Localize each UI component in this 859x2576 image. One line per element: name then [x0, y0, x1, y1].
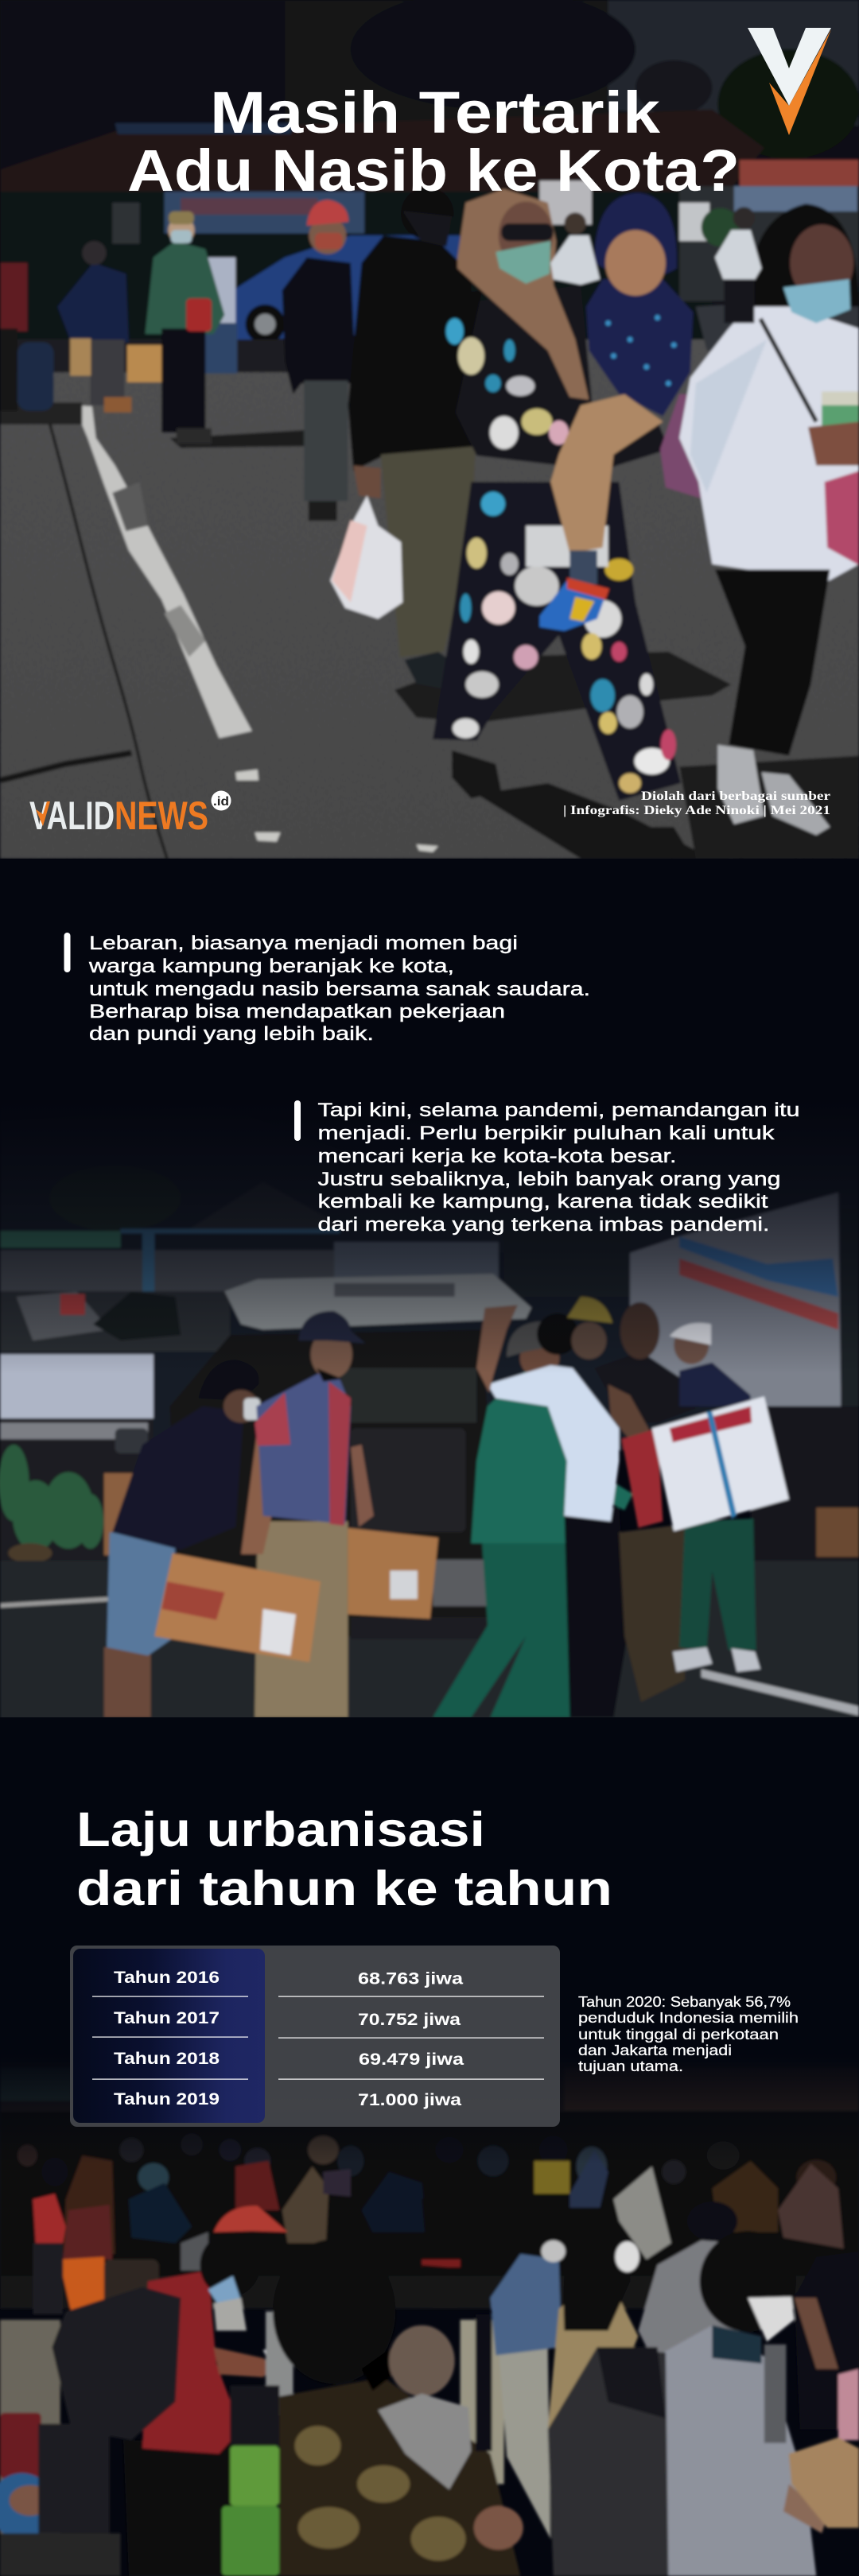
paragraph: Tapi kini: menjadi. Perlu berpikir puluhan kali untuk	[318, 1123, 775, 1144]
year column	[73, 1949, 265, 2123]
child being carried	[586, 279, 693, 416]
green bags and cart	[230, 2446, 279, 2506]
year column: Tahun 2017	[114, 2009, 220, 2027]
heading: Laju urbanisasi: dari tahun ke tahun	[76, 1861, 612, 1915]
panel: urbanization rate section	[0, 1717, 859, 2576]
paragraph: Lebaran: dan pundi yang lebih baik.	[89, 1023, 374, 1045]
source credit: | Infografis: Dieky Ade Ninoki | Mei 2021	[563, 804, 830, 817]
woman in white sweater	[660, 394, 702, 499]
source credit	[563, 789, 830, 817]
paragraph: Tapi kini: dari mereka yang terkena imbas pandemi.	[318, 1214, 770, 1236]
officers	[550, 235, 600, 285]
year column: Tahun 2019	[114, 2090, 220, 2109]
man in batik carrying baby	[279, 2377, 520, 2576]
navy fade over photo	[0, 1717, 859, 2576]
left background people	[0, 263, 27, 332]
girl in denim jacket	[499, 2347, 550, 2539]
men behind the box	[619, 1524, 685, 1702]
photo scene: street with masked people	[0, 0, 859, 859]
headline: Masih Tertarik	[210, 80, 661, 145]
photo scene: crowded terminal	[0, 1717, 859, 2576]
value column: 69.479 jiwa	[359, 2050, 464, 2069]
paragraph: Tapi kini: kembali ke kampung, karena tidak sedikit	[318, 1191, 768, 1212]
accent bar	[64, 933, 70, 972]
side note: 2020: untuk tinggal di perkotaan	[578, 2027, 779, 2043]
value column: 71.000 jiwa	[358, 2091, 461, 2109]
year column: Tahun 2018	[114, 2050, 220, 2068]
logo: VALIDNEWS.id	[29, 790, 231, 838]
year column: Tahun 2016	[114, 1969, 220, 1987]
man in black hoodie	[348, 235, 472, 471]
panel: hero photo of travellers walking	[0, 0, 859, 859]
side note: 2020: penduduk Indonesia memilih	[578, 2010, 799, 2026]
man in white shirt	[564, 1507, 628, 1717]
logo: VALIDNEWS.id: NEWS	[115, 793, 208, 838]
paragraph: Lebaran: warga kampung beranjak ke kota,	[88, 956, 454, 977]
side note: 2020	[578, 1994, 799, 2074]
value column	[278, 1970, 544, 2109]
woman with orange pants	[63, 2155, 115, 2260]
white carton	[622, 1428, 663, 1528]
heading: Laju urbanisasi: Laju urbanisasi	[76, 1802, 485, 1856]
logo: VALIDNEWS.id: VALID	[29, 793, 115, 838]
side note: 2020: dan Jakarta menjadi	[578, 2043, 732, 2058]
value column: 70.752 jiwa	[358, 2011, 461, 2029]
cardboard boxes	[154, 1553, 321, 1662]
man in grey shirt	[638, 2240, 740, 2353]
girl in beige coat	[548, 2287, 638, 2429]
side note: 2020: tujuan utama.	[578, 2058, 683, 2074]
man in black tee, red cap	[282, 258, 356, 394]
value column: 68.763 jiwa	[358, 1970, 463, 1988]
paragraph: Tapi kini: mencari kerja ke kota-kota besar.	[318, 1146, 676, 1167]
woman in floral outfit	[444, 285, 670, 467]
boxes	[789, 2438, 859, 2528]
van	[224, 1274, 531, 1329]
paragraph: Tapi kini: Tapi kini, selama pandemi, pemandangan itu	[318, 1100, 800, 1121]
paragraph: Tapi kini: Justru sebaliknya, lebih banyak orang yang	[318, 1169, 781, 1190]
floral pattern	[446, 318, 676, 793]
icon: V brand mark	[748, 28, 831, 135]
plastic bag	[330, 495, 402, 619]
background crowd	[17, 2133, 836, 2195]
potted plants	[0, 1445, 103, 1551]
heading: Laju urbanisasi	[76, 1802, 612, 1915]
shadows	[395, 652, 732, 723]
logo: VALIDNEWS.id: .id	[213, 795, 229, 809]
accent bar	[294, 1100, 301, 1141]
paragraph: Tapi kini	[294, 1100, 800, 1236]
man with cap and dark jersey	[104, 1647, 150, 1717]
source credit: Diolah dari berbagai sumber	[641, 789, 830, 803]
man in red shirt with backpack	[123, 2440, 235, 2576]
headline: Adu Nasib ke Kota?	[127, 138, 740, 204]
paragraph: Lebaran: Lebaran, biasanya menjadi momen bagi	[89, 933, 518, 954]
road marking and cracks	[74, 405, 252, 739]
man in black tee	[795, 2252, 859, 2429]
paragraph: Lebaran	[64, 933, 590, 1045]
navy fade over photo	[0, 859, 859, 1717]
man with backpack and grey jacket	[663, 2326, 816, 2576]
paragraph: Lebaran: untuk mengadu nasib bersama sanak saudara.	[89, 979, 590, 1000]
photo scene: men unloading boxes from a van	[0, 859, 859, 1720]
panel: intro text over loading-boxes photo	[0, 859, 859, 1720]
headline	[127, 80, 740, 204]
side note: 2020: Tahun 2020: Sebanyak 56,7%	[578, 1994, 791, 2010]
man in green uniform	[433, 1538, 582, 1717]
data table: migrants per year	[70, 1946, 560, 2127]
man in blue vest	[255, 1521, 348, 1717]
paragraph: Lebaran: Berharap bisa mendapatkan pekerjaan	[89, 1001, 505, 1022]
